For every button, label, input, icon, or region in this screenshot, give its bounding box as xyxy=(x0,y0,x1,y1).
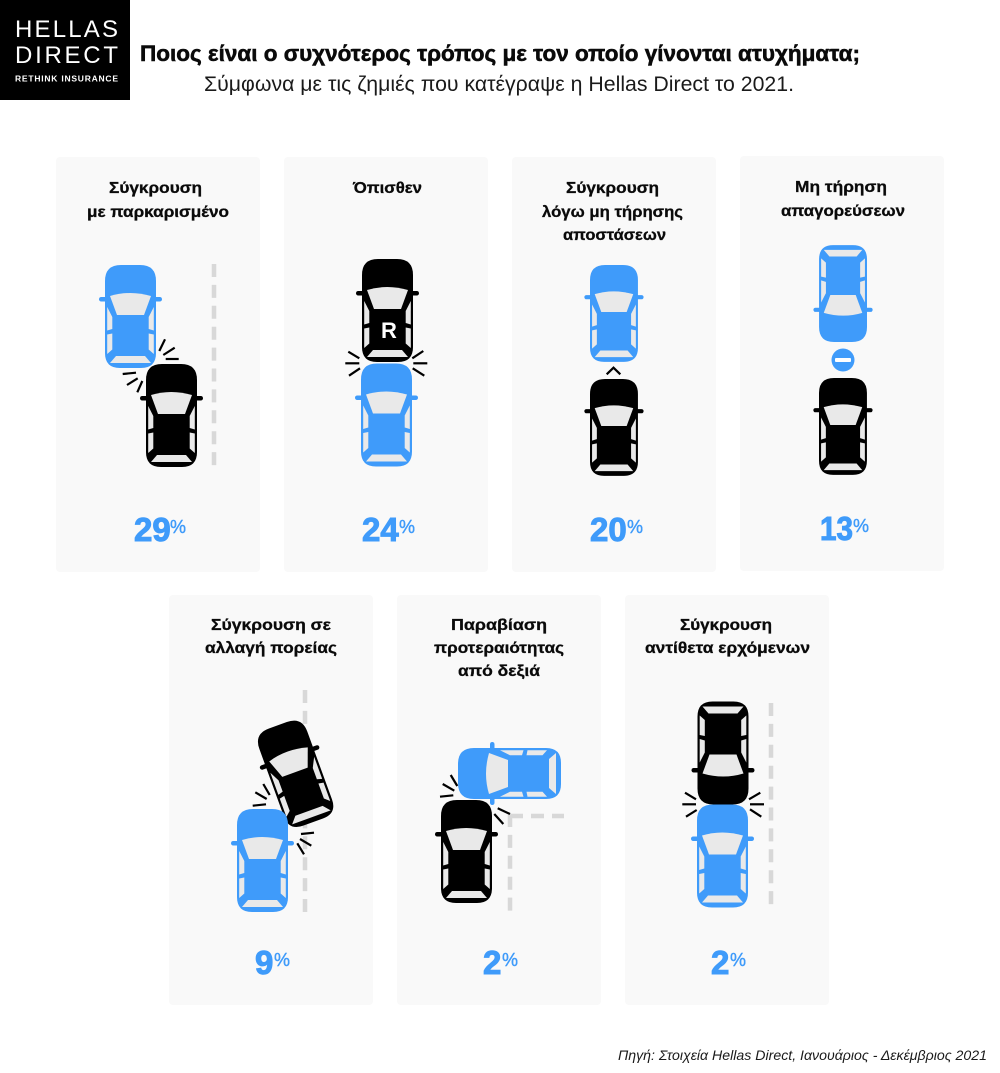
value 24%: % xyxy=(399,517,415,537)
heading: Σύγκρουση xyxy=(109,180,202,197)
blue car xyxy=(99,265,162,368)
black car xyxy=(356,259,419,362)
heading: Όπισθεν xyxy=(352,180,422,197)
heading: λόγω μη τήρησης xyxy=(542,204,683,221)
logo: Hellas Direct xyxy=(0,0,130,100)
black car xyxy=(248,715,343,833)
value 29%: % xyxy=(170,517,186,537)
heading xyxy=(205,617,337,657)
panel: parked collision 29% xyxy=(56,157,260,572)
heading xyxy=(645,617,810,657)
heading xyxy=(87,180,229,221)
road line xyxy=(769,703,773,905)
panel: lane change 9% xyxy=(169,595,373,1005)
panel: right of way 2% xyxy=(397,595,601,1005)
value 2% xyxy=(483,944,518,981)
heading xyxy=(542,180,683,244)
impact lines xyxy=(253,784,314,854)
value 29%: 29 xyxy=(134,511,171,548)
panel: prohibition violation 13% xyxy=(740,156,944,571)
source note: Πηγή: Στοιχεία Hellas Direct, Ιανουάριος - Δεκέμβριος 2021 xyxy=(618,1047,987,1063)
blue car xyxy=(584,265,644,362)
heading: αποστάσεων xyxy=(563,227,666,244)
blue car xyxy=(355,364,418,466)
value 2%: 2 xyxy=(483,944,501,981)
value 2%: % xyxy=(502,950,518,970)
value 20%: 20 xyxy=(590,511,627,548)
value 2% xyxy=(711,944,746,981)
chevron xyxy=(607,368,620,374)
value 2%: 2 xyxy=(711,944,729,981)
value 13%: 13 xyxy=(820,510,853,547)
heading: αντίθετα ερχόμενων xyxy=(645,640,810,657)
value 9%: 9 xyxy=(255,944,273,981)
black car xyxy=(435,800,498,903)
impact lines xyxy=(682,793,764,817)
title: Ποιος είναι ο συχνότερος τρόπος με τον οποίο γίνονται ατυχήματα; xyxy=(140,41,860,66)
value 9% xyxy=(255,944,290,981)
heading xyxy=(434,617,564,680)
heading: Σύγκρουση σε xyxy=(211,617,331,634)
blue car xyxy=(691,804,754,908)
black car xyxy=(813,378,873,475)
value 20%: % xyxy=(627,517,643,537)
heading: με παρκαρισμένο xyxy=(87,204,229,221)
heading: Μη τήρηση xyxy=(795,179,887,196)
impact lines xyxy=(345,351,427,376)
subtitle: Σύμφωνα με τις ζημιές που κατέγραψε η Hellas Direct το 2021. xyxy=(204,73,794,96)
heading: αλλαγή πορείας xyxy=(205,640,337,657)
logo: Hellas Direct: DIRECT xyxy=(15,42,118,69)
blue car xyxy=(458,742,561,805)
heading: από δεξιά xyxy=(458,663,540,680)
road line xyxy=(303,690,307,912)
heading: Σύγκρουση xyxy=(566,180,659,197)
road line xyxy=(212,264,216,467)
heading: απαγορεύσεων xyxy=(781,203,905,220)
blue car xyxy=(231,809,294,912)
heading: Σύγκρουση xyxy=(680,617,772,634)
reverse letter: R xyxy=(381,318,397,343)
impact lines xyxy=(440,775,510,824)
black car xyxy=(140,364,203,467)
value 24%: 24 xyxy=(362,511,399,548)
no-entry sign xyxy=(832,348,854,372)
logo: Hellas Direct: HELLAS xyxy=(15,16,118,43)
black car xyxy=(692,702,754,804)
heading: προτεραιότητας xyxy=(434,640,564,657)
logo: Hellas Direct: RETHINK INSURANCE xyxy=(15,74,118,84)
value 2%: % xyxy=(730,950,746,970)
value 9%: % xyxy=(274,950,290,970)
road lines xyxy=(510,814,564,912)
value 20% xyxy=(590,511,643,548)
heading: Παραβίαση xyxy=(451,617,547,634)
panel: insufficient distance 20% xyxy=(512,157,716,572)
value 13%: % xyxy=(853,516,869,536)
black car xyxy=(584,379,644,476)
impact lines xyxy=(123,339,179,392)
panel: head-on 2% xyxy=(625,595,829,1005)
panel: reversing 24% xyxy=(284,157,488,572)
heading xyxy=(781,179,905,220)
value 24% xyxy=(362,511,415,548)
blue car xyxy=(813,245,873,342)
